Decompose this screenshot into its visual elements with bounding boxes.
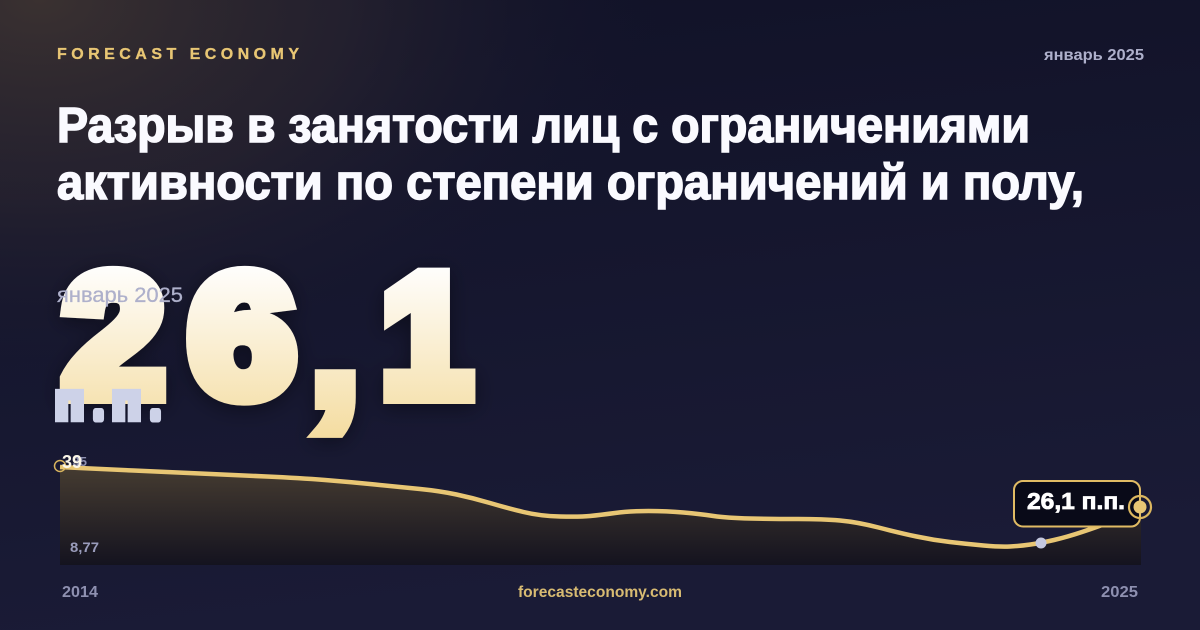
axis start year: 2014 <box>62 584 98 601</box>
big number: 1 <box>382 240 472 432</box>
title: активности по степени ограничений и полу, <box>57 156 1084 210</box>
max value label: 35 <box>72 454 87 469</box>
end marker <box>1129 496 1151 518</box>
axis end year: 2025 <box>1101 584 1138 601</box>
big number <box>63 240 472 442</box>
unit: . <box>150 374 161 430</box>
chart area fill <box>60 467 1141 565</box>
big number: 2 <box>63 240 164 432</box>
title <box>57 99 1084 210</box>
low point marker <box>1036 538 1046 548</box>
unit: п <box>55 374 84 430</box>
start marker <box>54 460 66 472</box>
source url: forecasteconomy.com <box>518 584 682 601</box>
title: Разрыв в занятости лиц с ограничениями <box>57 99 1030 153</box>
big number: , <box>309 241 361 442</box>
callout: 26,1 п.п. <box>1027 488 1125 514</box>
area chart: 39 <box>62 452 82 472</box>
brand label: FORECAST ECONOMY <box>57 46 299 63</box>
big number: 6 <box>189 240 295 432</box>
area chart <box>54 452 1151 565</box>
callout <box>1014 481 1140 526</box>
min value label: 8,77 <box>70 539 99 555</box>
date top right: январь 2025 <box>1043 47 1144 64</box>
unit: п <box>112 374 141 430</box>
subtitle date: январь 2025 <box>57 284 183 307</box>
unit: . <box>93 374 104 430</box>
unit <box>55 374 161 430</box>
chart line <box>60 467 1140 547</box>
